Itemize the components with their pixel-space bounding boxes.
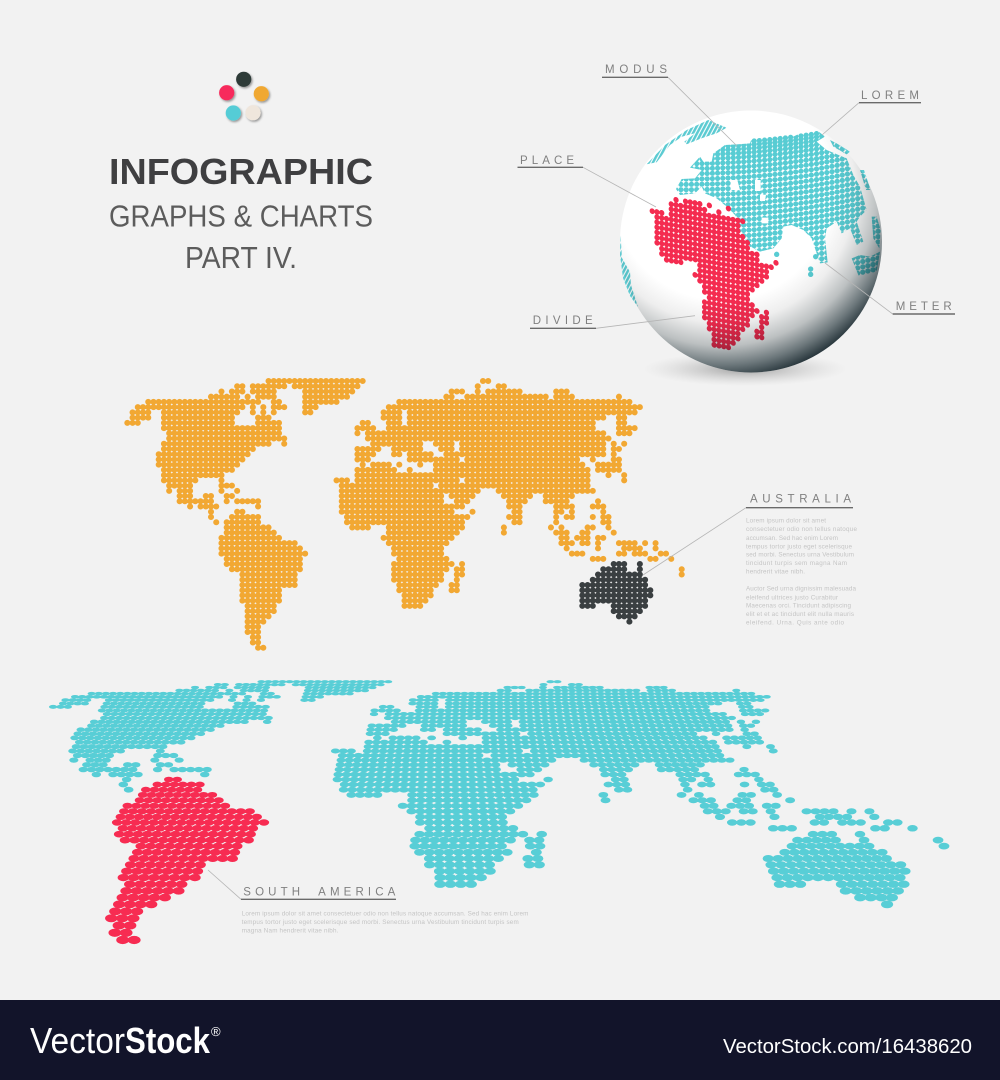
Australia description text: eleifend. Urna. Quis ante odio bbox=[746, 620, 844, 627]
Australia description text: elit et et ac tincidunt elit nulla mauris bbox=[746, 611, 854, 618]
globe label: DIVIDE: DIVIDE bbox=[533, 315, 593, 327]
Australia description text: eleifend ultrices justo Curabitur bbox=[746, 594, 838, 601]
Australia description text bbox=[746, 518, 857, 627]
South America red dots bbox=[111, 780, 265, 940]
Australia description text: tincidunt turpis sem magna Nam bbox=[746, 560, 847, 567]
South America description text: magna Nam hendrerit vitae nibh. bbox=[242, 927, 339, 934]
globe: Americas edge strips bbox=[620, 120, 727, 307]
globe label: PLACE bbox=[518, 155, 656, 207]
footer bar: VectorStock.com/16438620 bbox=[723, 1036, 972, 1058]
globe label: LOREM: LOREM bbox=[861, 90, 919, 102]
Australia description text: sed morbi. Senectus urna Vestibulum bbox=[746, 552, 854, 559]
title bbox=[109, 151, 373, 275]
Australia description text: hendrerit vitae nibh. bbox=[746, 569, 805, 576]
South America description text: Lorem ipsum dolor sit amet consectetuer odio non tellus natoque accumsan. Sed hac enim Lorem bbox=[242, 910, 528, 918]
teal perspective world map bbox=[53, 682, 945, 904]
Australia dark dots on orange map bbox=[582, 564, 651, 622]
Australia description text: Lorem ipsum dolor sit amet bbox=[746, 518, 826, 525]
globe label: MODUS bbox=[602, 64, 737, 146]
Australia description text: accumsan. Sed hac enim Lorem bbox=[746, 535, 838, 542]
globe label: METER bbox=[825, 263, 955, 314]
globe label: PLACE: PLACE bbox=[520, 155, 574, 167]
Australia description text: consectetuer odio non tellus natoque bbox=[746, 526, 857, 533]
Australia description text: Maecenas orci. Tincidunt adipiscing bbox=[746, 603, 851, 610]
Australia description text: Auctor Sed urna dignissim malesuada bbox=[746, 586, 856, 593]
globe label: DIVIDE bbox=[530, 315, 695, 328]
footer bar: ® bbox=[211, 1024, 221, 1039]
logo: five coloured dots bbox=[219, 72, 269, 121]
South America callout bbox=[208, 870, 528, 934]
globe bbox=[620, 110, 883, 372]
orange dotted world map bbox=[127, 381, 682, 648]
South America callout: SOUTH AMERICA bbox=[243, 887, 396, 899]
footer bar bbox=[0, 1000, 1000, 1080]
title: PART IV. bbox=[185, 240, 297, 275]
globe: Africa red dots bbox=[652, 196, 776, 355]
globe: Eurasia teal dots bbox=[676, 131, 881, 277]
footer bar: Vector bbox=[30, 1020, 125, 1061]
title: GRAPHS & CHARTS bbox=[109, 198, 373, 234]
globe label: MODUS: MODUS bbox=[605, 64, 667, 76]
South America description text: tempus tortor justo eget scelerisque sed morbi. Senectus urna Vestibulum tincidunt turpis sem bbox=[242, 919, 519, 926]
globe label: METER: METER bbox=[896, 301, 952, 313]
title: INFOGRAPHIC bbox=[109, 151, 373, 192]
globe shadow bbox=[643, 352, 847, 386]
Australia callout: AUSTRALIA bbox=[750, 494, 851, 506]
footer bar: Stock bbox=[125, 1020, 211, 1061]
globe label: LOREM bbox=[822, 90, 921, 135]
South America description text bbox=[242, 910, 528, 934]
Australia description text: tempus tortor justo eget scelerisque bbox=[746, 543, 852, 550]
Australia callout bbox=[643, 494, 857, 627]
globe: shading bbox=[620, 110, 882, 372]
